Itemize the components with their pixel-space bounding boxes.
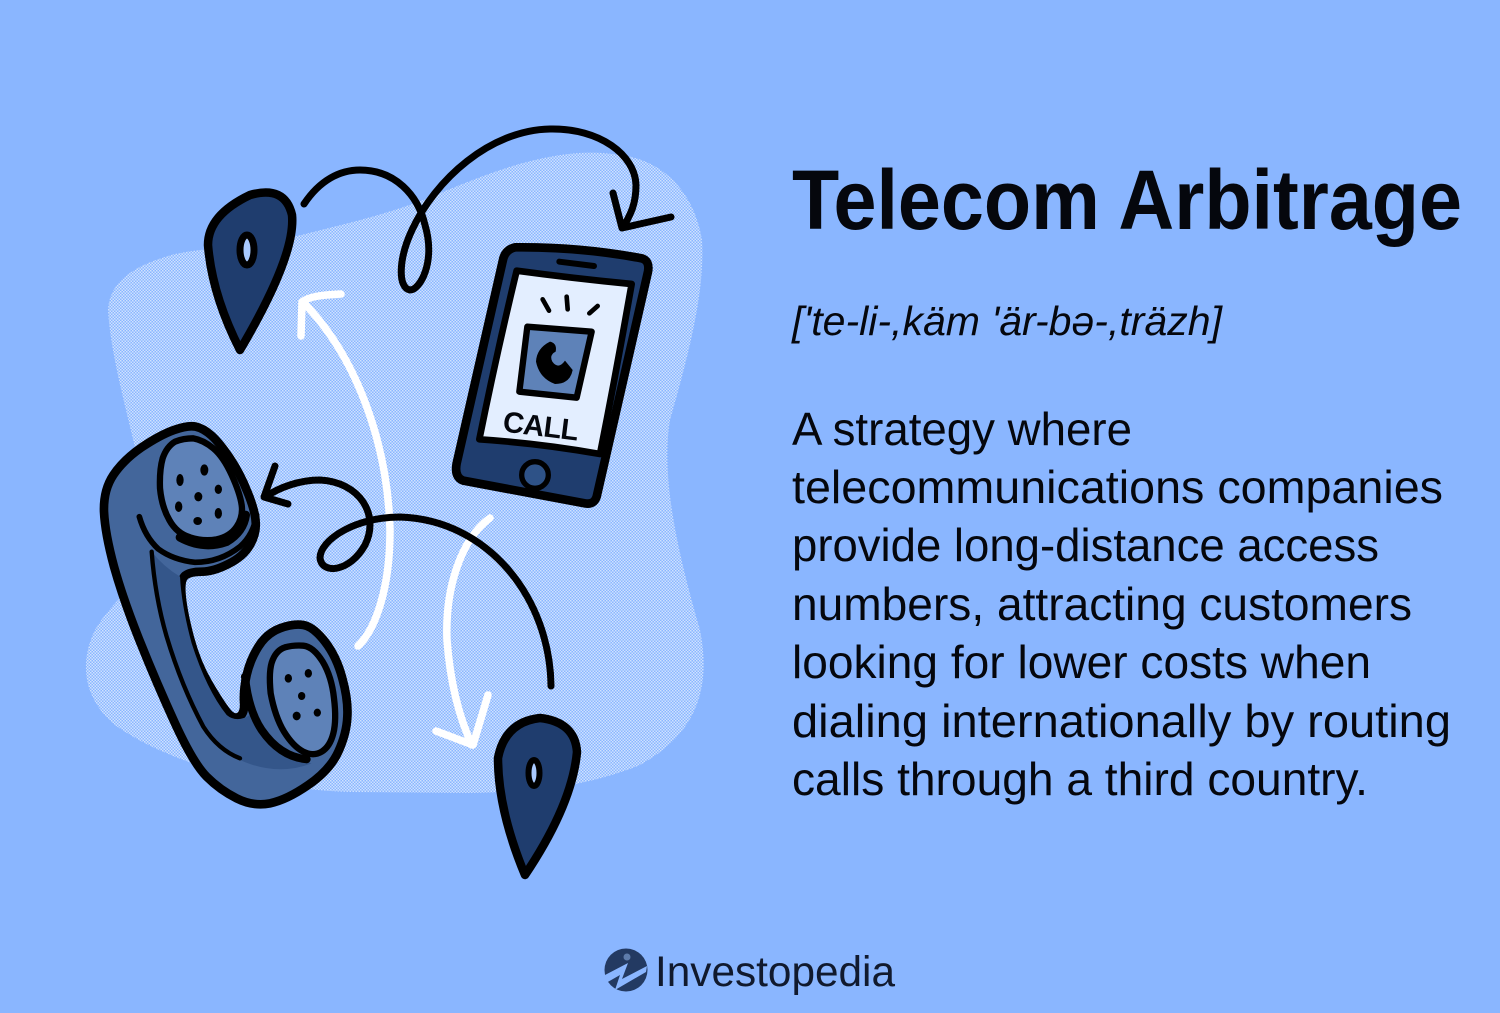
- definition text block: A strategy where: [792, 403, 1132, 455]
- definition text block: provide long-distance access: [792, 519, 1379, 571]
- halftone background blob: [86, 153, 704, 793]
- icon: location pin bottom: [498, 718, 577, 875]
- logo mark: [604, 948, 648, 992]
- earpiece bottom: [270, 646, 335, 754]
- definition text block: [792, 403, 1451, 805]
- definition text block: telecommunications companies: [792, 461, 1443, 513]
- title: Telecom Arbitrage: [792, 153, 1462, 247]
- arrow: white arrow to top pin: [301, 294, 390, 646]
- icon: smartphone with call screen: [456, 247, 648, 504]
- arrow: black looping arrow to smartphone: [304, 129, 671, 290]
- definition text block: calls through a third country.: [792, 753, 1368, 805]
- icon: telephone handset: [104, 426, 347, 804]
- earpiece top: [160, 438, 242, 540]
- definition text block: numbers, attracting customers: [792, 578, 1412, 630]
- arrow: white arrow to bottom pin: [436, 518, 490, 745]
- definition text block: looking for lower costs when: [792, 636, 1371, 688]
- Investopedia logo: Investopedia: [655, 948, 895, 996]
- pronunciation: ['te-li-,käm 'är-bə-,träzh]: [791, 298, 1224, 344]
- CALL label: CALL: [501, 406, 581, 448]
- phone screen: [479, 271, 632, 454]
- arrow: black looping arrow to handset: [264, 466, 551, 686]
- definition text block: dialing internationally by routing: [792, 695, 1451, 747]
- icon: location pin top: [208, 192, 292, 350]
